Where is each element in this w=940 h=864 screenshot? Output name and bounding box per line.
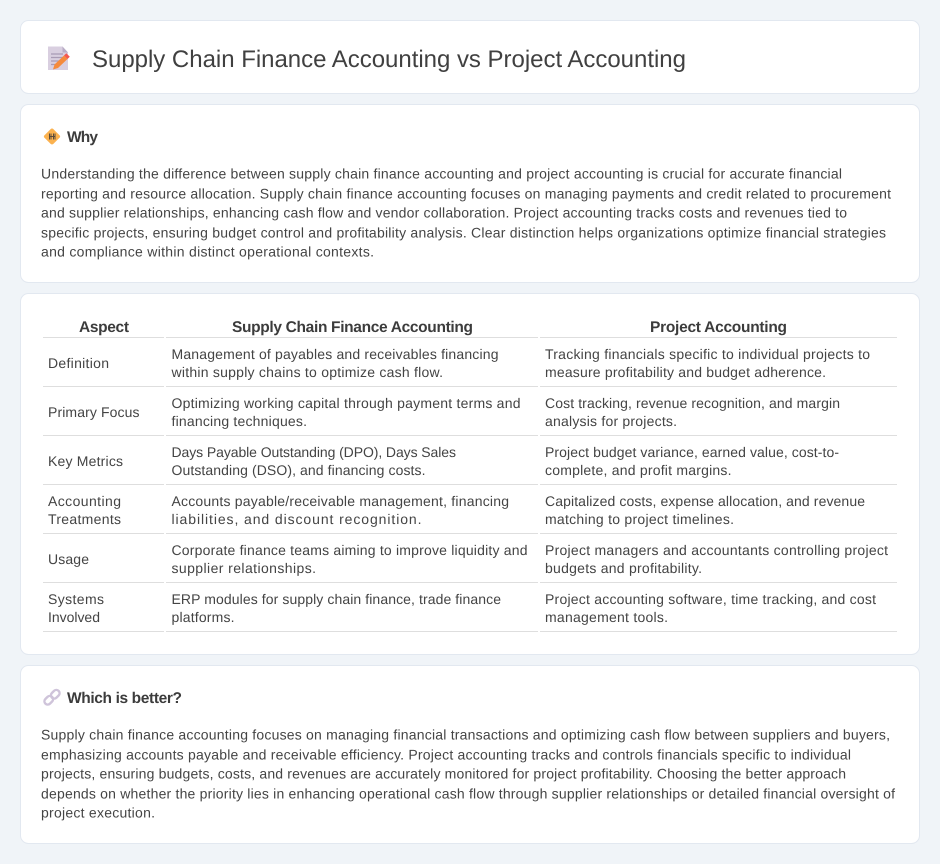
row: accounting treatments: matching to project timelines.: [545, 511, 734, 527]
row: key metrics: Key Metrics: [48, 453, 123, 469]
text: which paragraph: project execution.: [41, 804, 155, 820]
row: systems involved: management tools.: [545, 609, 668, 625]
row: definition: within supply chains to optimize cash flow.: [170, 364, 443, 380]
heading: why: Why: [67, 129, 98, 146]
icon: memo with pencil: [48, 46, 70, 70]
text: why paragraph: specific projects, ensuring budget control and profitability analysis. Clear distinction helps organizations optimize financial strategies: [41, 224, 886, 240]
panel: comparison table: [20, 294, 920, 654]
row: usage: [43, 542, 897, 583]
row: definition: Tracking financials specific to individual projects to: [545, 346, 870, 362]
row: primary focus: analysis for projects.: [545, 413, 677, 429]
text: which paragraph: [41, 726, 895, 820]
row: usage: Usage: [48, 551, 89, 567]
title: Supply Chain Finance Accounting vs Project Accounting: [92, 46, 686, 73]
text: why paragraph: reporting and resource allocation. Supply chain finance accounting focuses on managing payments and credit related to procurement: [41, 186, 891, 202]
row: usage: Corporate finance teams aiming to improve liquidity and: [172, 542, 528, 558]
row: key metrics: Outstanding (DSO), and financing costs.: [172, 462, 426, 478]
row: primary focus: [43, 395, 897, 436]
row: systems involved: ERP modules for supply chain finance, trade finance: [172, 591, 501, 607]
row: systems involved: Systems: [48, 591, 104, 607]
text: why paragraph: [41, 166, 891, 260]
text: which paragraph: projects, ensuring budgets, costs, and revenues are accurately monitored for project profitability. Choosing the better approach: [41, 766, 846, 782]
text: which paragraph: depends on whether the priority lies in enhancing operational cash flow through supplier relationships or detailed financial oversight of: [41, 786, 895, 802]
row: primary focus: Primary Focus: [48, 404, 140, 420]
row: systems involved: Project accounting software, time tracking, and cost: [545, 591, 876, 607]
row: primary focus: financing techniques.: [172, 413, 307, 429]
panel: header: [20, 20, 920, 94]
row: definition: Management of payables and receivables financing: [172, 346, 498, 362]
row: key metrics: complete, and profit margins.: [545, 462, 732, 478]
table header: Aspect: [79, 319, 129, 336]
panel: which is better: [20, 666, 920, 844]
row: definition: measure profitability and budget adherence.: [545, 364, 826, 380]
row: key metrics: Days Payable Outstanding (DPO), Days Sales: [172, 444, 456, 460]
icon: diamond sign: [44, 128, 60, 144]
text: why paragraph: Understanding the difference between supply chain finance accounting and project accounting is crucial for accurate financial: [41, 166, 842, 182]
row: key metrics: Project budget variance, earned value, cost-to-: [545, 444, 839, 460]
row: accounting treatments: [43, 493, 897, 534]
table header: Supply Chain Finance Accounting: [232, 319, 473, 336]
row: systems involved: [43, 591, 897, 632]
row: systems involved: Involved: [48, 609, 100, 625]
row: accounting treatments: Accounting: [48, 493, 121, 509]
row: accounting treatments: Capitalized costs, expense allocation, and revenue: [545, 493, 865, 509]
text: why paragraph: and compliance within distinct operational contexts.: [41, 244, 374, 260]
row: primary focus: Cost tracking, revenue recognition, and margin: [545, 395, 840, 411]
icon: link: [43, 689, 61, 706]
row: primary focus: Optimizing working capital through payment terms and: [172, 395, 520, 411]
text: which paragraph: emphasizing accounts payable and receivable efficiency. Project accounting tracks and controls financials specific to individual: [41, 746, 851, 762]
table header: Project Accounting: [650, 319, 787, 336]
row: key metrics: [43, 444, 897, 485]
row: systems involved: platforms.: [172, 609, 234, 625]
panel: why: [20, 104, 920, 282]
text: why paragraph: and supplier relationships, enhancing cash flow and vendor collaboration. Project accounting tracks costs and revenues tied to: [41, 204, 847, 220]
row: accounting treatments: liabilities, and discount recognition.: [172, 511, 422, 527]
row: usage: supplier relationships.: [172, 560, 316, 576]
row: accounting treatments: Accounts payable/receivable management, financing: [172, 493, 509, 509]
text: which paragraph: Supply chain finance accounting focuses on managing financial transactions and optimizing cash flow between suppliers and buyers,: [41, 726, 890, 742]
heading: which is better: Which is better?: [67, 690, 182, 707]
row: usage: budgets and profitability.: [545, 560, 702, 576]
row: accounting treatments: Treatments: [48, 511, 121, 527]
table header: [43, 319, 897, 338]
row: definition: Definition: [48, 355, 109, 371]
row: usage: Project managers and accountants controlling project: [545, 542, 888, 558]
row: definition: [43, 346, 897, 387]
